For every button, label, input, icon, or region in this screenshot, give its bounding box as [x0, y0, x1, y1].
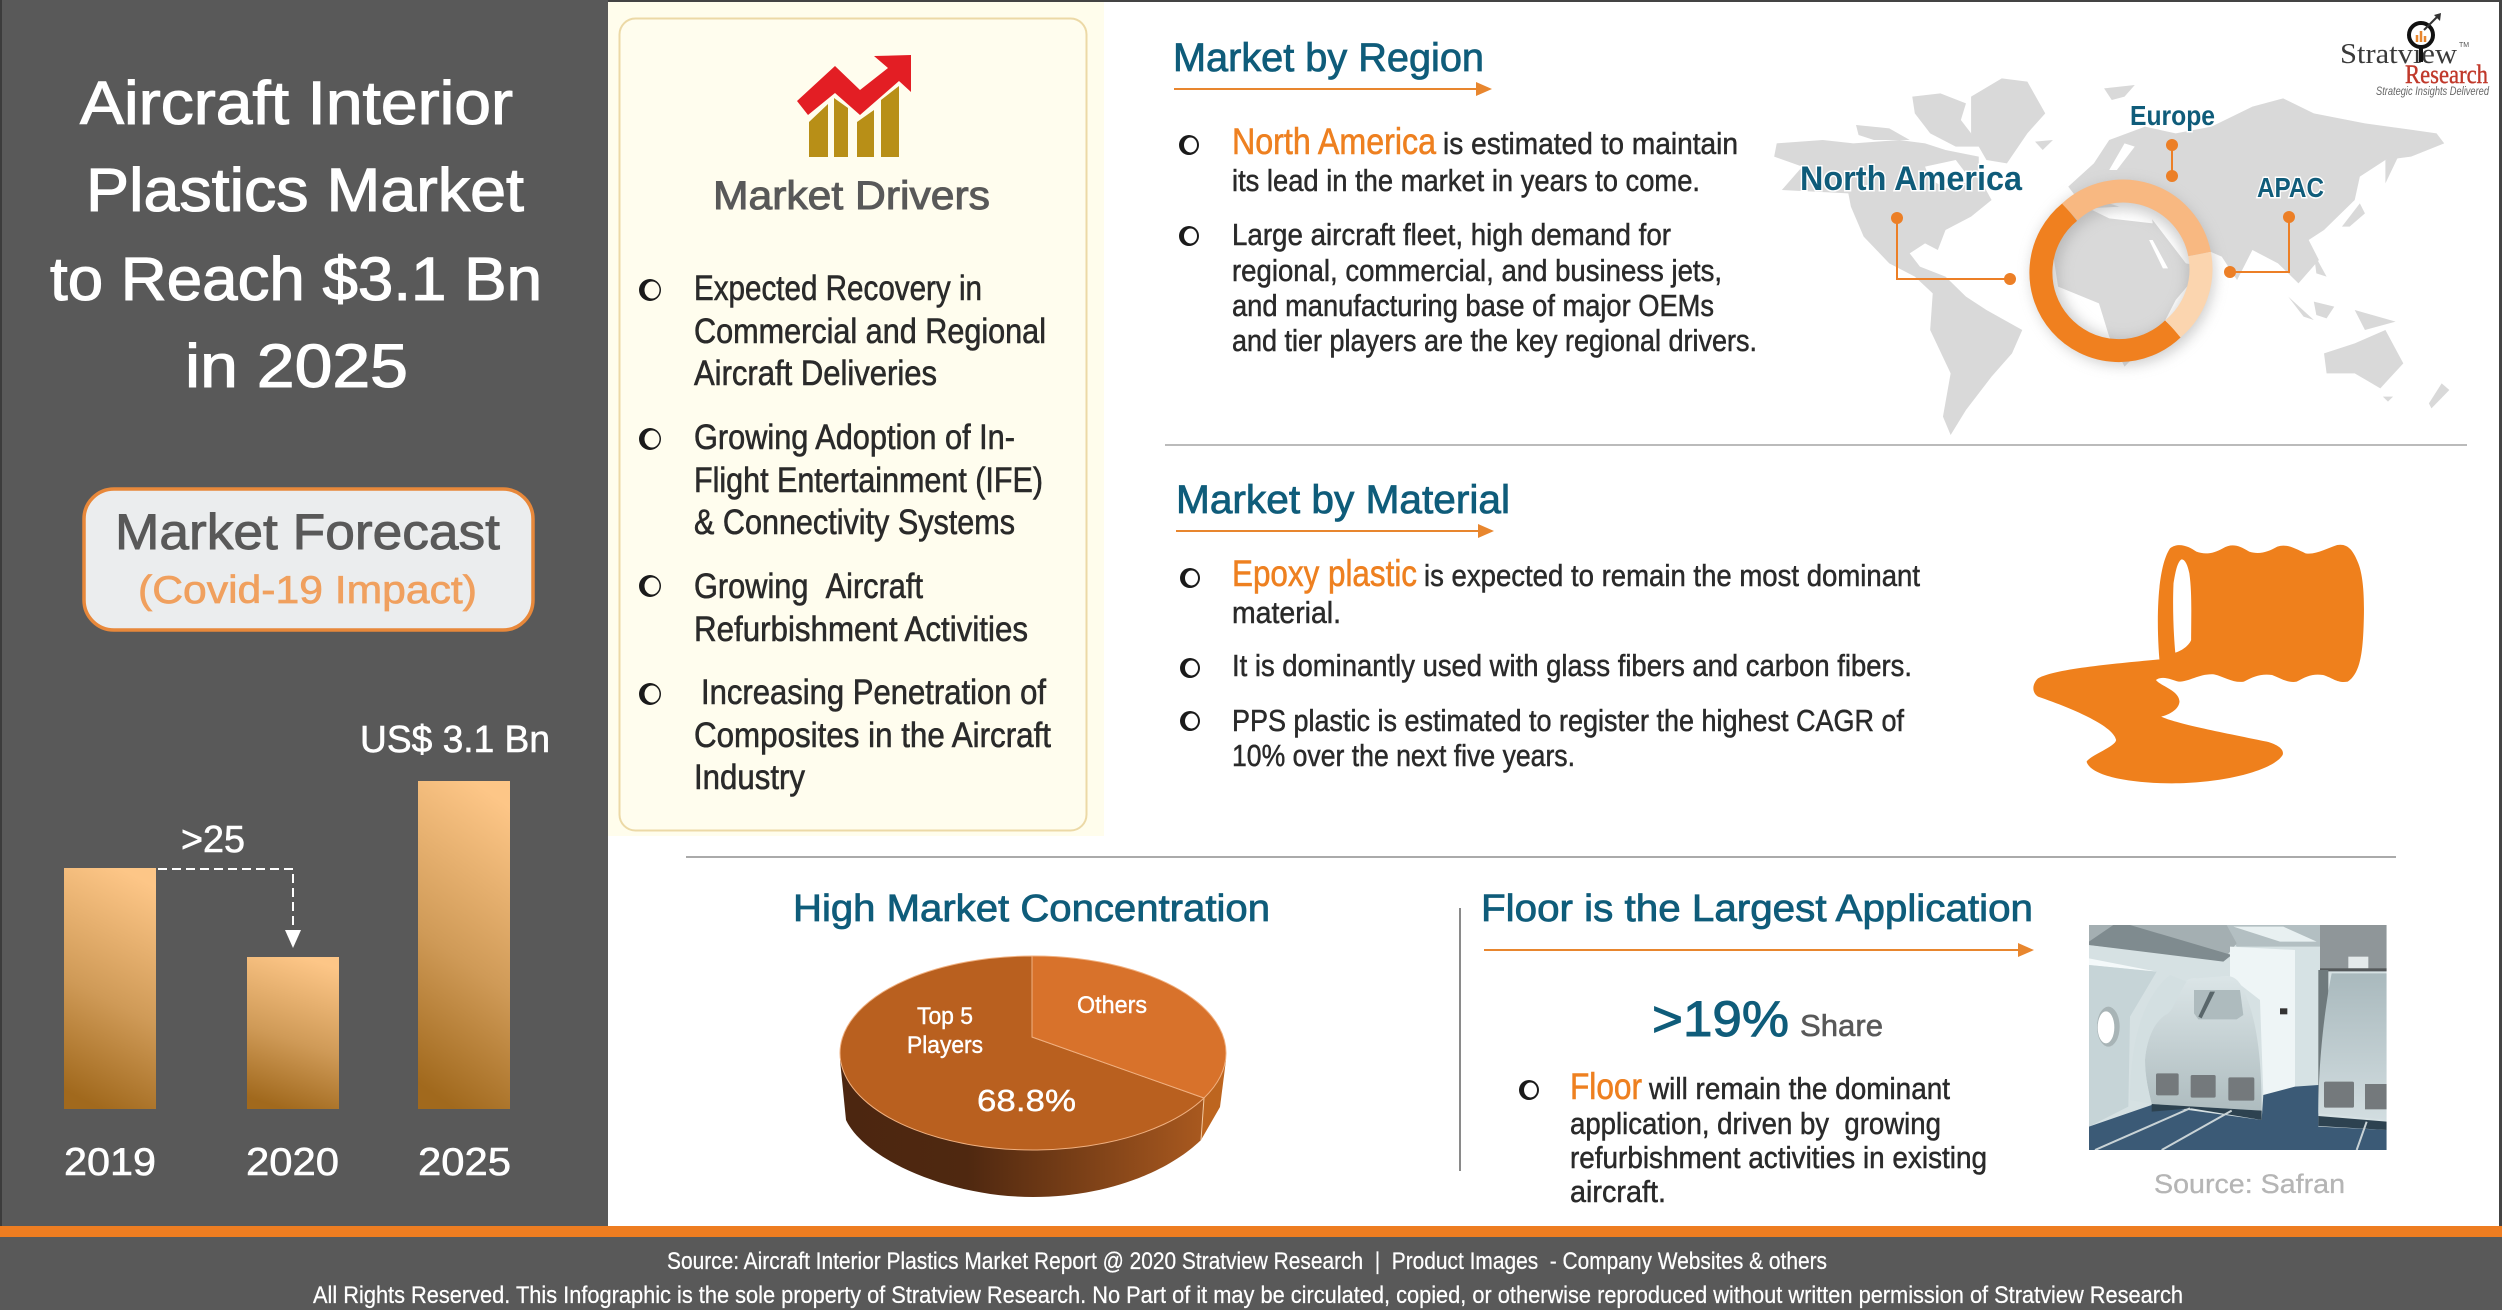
floor text: will remain the dominant [1648, 1071, 1950, 1106]
title: in 2025 [185, 332, 408, 400]
pie chart: Players [907, 1032, 983, 1059]
region text: regional, commercial, and business jets, [1232, 253, 1722, 288]
arrow: heading underline [1176, 524, 1494, 538]
material text: PPS plastic is estimated to register the highest CAGR of [1232, 703, 1904, 738]
connectors [1891, 139, 2295, 285]
logo: Stratview Research [2340, 13, 2489, 98]
pie chart [840, 956, 1226, 1197]
driver list [639, 269, 1051, 797]
heading: Floor is the Largest Application [1481, 888, 2033, 930]
title [50, 69, 542, 400]
driver list: Refurbishment Activities [694, 610, 1028, 649]
market forecast badge: (Covid-19 Impact) [138, 569, 477, 612]
heading: Market Drivers [713, 174, 990, 218]
floor text: application, driven by growing [1570, 1106, 1941, 1141]
region text: its lead in the market in years to come. [1232, 163, 1700, 198]
market forecast badge [84, 489, 533, 630]
logo: Stratview Research: Research [2405, 60, 2488, 89]
floor text [1519, 1066, 1987, 1209]
share stat: Share [1800, 1008, 1883, 1043]
material text: is expected to remain the most dominant [1424, 558, 1920, 593]
pie chart: 68.8% [977, 1083, 1076, 1118]
bar chart: 2020 [246, 1141, 339, 1184]
share stat: >19% [1652, 991, 1789, 1047]
region text: Large aircraft fleet, high demand for [1232, 217, 1671, 252]
driver list: & Connectivity Systems [694, 503, 1015, 542]
region text: is estimated to maintain [1443, 126, 1738, 161]
world map [1774, 78, 2449, 435]
floor text: aircraft. [1570, 1174, 1666, 1209]
driver list: Increasing Penetration of [701, 673, 1046, 712]
pie chart: Others [1077, 992, 1147, 1019]
region text: North America [1232, 121, 1436, 162]
ring chart [2041, 191, 2201, 352]
icon: spilled barrel [2033, 545, 2364, 783]
arrow: decline 2019 to 2020 [158, 869, 301, 948]
material text: material. [1232, 595, 1341, 630]
panel: market by region [1173, 36, 2449, 435]
logo: Stratview Research: TM [2459, 42, 2469, 49]
driver list: Aircraft Deliveries [694, 354, 937, 393]
logo: Stratview Research: Stratview [2340, 38, 2457, 70]
map labels: APAC [2257, 172, 2324, 203]
bar chart [64, 719, 550, 1184]
region text [1179, 121, 1757, 358]
title: Plastics Market [86, 156, 524, 224]
driver list: Growing Adoption of In- [694, 418, 1015, 457]
heading: Market by Material [1176, 478, 1510, 522]
region text: and tier players are the key regional drivers. [1232, 323, 1757, 358]
map labels: Europe [2130, 100, 2215, 131]
panel: market drivers [608, 2, 1104, 836]
panel: left forecast [0, 0, 608, 1226]
material text [1180, 553, 1920, 773]
title: to Reach $3.1 Bn [50, 245, 542, 313]
panel: market by material [1176, 478, 2364, 783]
arrow: heading underline [1484, 943, 2034, 957]
panel: market concentration [793, 888, 1270, 1197]
map labels [1800, 100, 2324, 203]
share stat [1652, 991, 1883, 1047]
floor text: Floor [1570, 1066, 1642, 1107]
footer: Source: Aircraft Interior Plastics Market Report @ 2020 Stratview Research | Product Images - Company Websites & others [667, 1248, 1827, 1275]
bar chart: 2019 [64, 1141, 156, 1184]
driver list: Growing Aircraft [694, 567, 923, 606]
material text: Epoxy plastic [1232, 553, 1417, 594]
pie chart: Top 5 [917, 1003, 973, 1030]
market forecast badge: Market Forecast [115, 504, 500, 560]
heading: High Market Concentration [793, 888, 1270, 930]
driver list: Commercial and Regional [694, 312, 1046, 351]
heading: Market by Region [1173, 36, 1484, 80]
driver list: Flight Entertainment (IFE) [694, 461, 1043, 500]
driver list: Industry [694, 758, 805, 797]
region text: and manufacturing base of major OEMs [1232, 288, 1714, 323]
title: Aircraft Interior [80, 69, 513, 137]
photo: aircraft cabin [2089, 925, 2387, 1150]
footer [0, 1226, 2502, 1310]
panel: floor application [1481, 888, 2387, 1209]
material text: It is dominantly used with glass fibers and carbon fibers. [1232, 648, 1912, 683]
driver list: Composites in the Aircraft [694, 716, 1051, 755]
bar chart: >25 [181, 819, 245, 861]
bar chart: US$ 3.1 Bn [360, 719, 550, 761]
floor text: refurbishment activities in existing [1570, 1140, 1987, 1175]
photo source: Source: Safran [2154, 1169, 2345, 1199]
map labels: North America [1800, 160, 2023, 198]
icon: rising chart [797, 55, 911, 157]
driver list: Expected Recovery in [694, 269, 982, 308]
arrow: heading underline [1174, 82, 1492, 96]
footer: All Rights Reserved. This Infographic is the sole property of Stratview Research. No Part of it may be circulated, copied, or otherwise reproduced without written permission of Stratview Research [313, 1282, 2183, 1309]
material text: 10% over the next five years. [1232, 738, 1575, 773]
bar chart: 2025 [418, 1141, 511, 1184]
